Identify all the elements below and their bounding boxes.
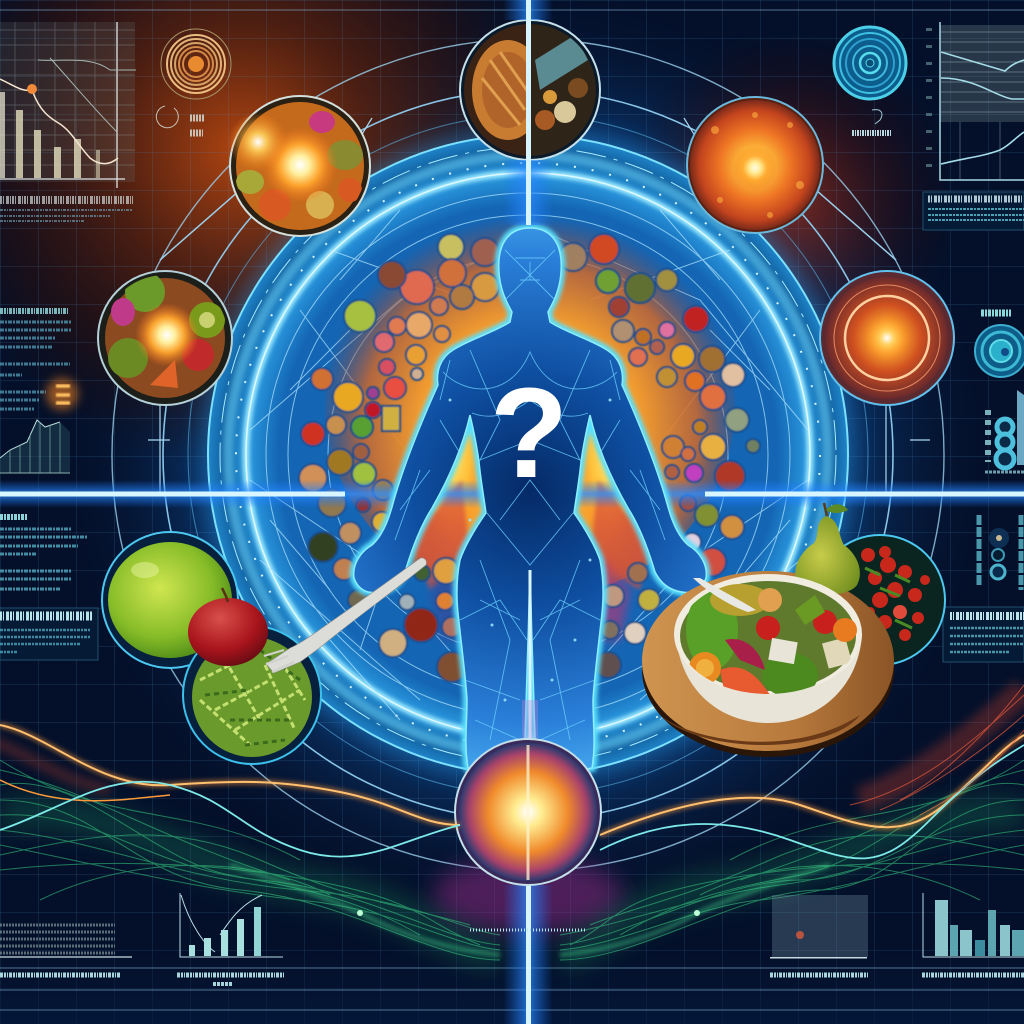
panel: bottom-left bar chart	[177, 893, 285, 984]
left food circle with glow	[98, 271, 232, 405]
food icons: left cluster	[299, 234, 499, 682]
upper-left food circle with glow	[228, 96, 370, 236]
knife	[693, 578, 756, 612]
food icons: right cluster	[559, 234, 760, 678]
apple circle	[102, 532, 238, 668]
question mark: ?	[490, 362, 568, 505]
human body figure	[354, 228, 706, 771]
sine waves with green particle fan	[0, 685, 1024, 960]
outer orbit rings	[112, 39, 944, 871]
magenta glow below bottom circle	[433, 857, 623, 933]
panel: lower-left text block	[0, 517, 98, 660]
vertical light beam	[503, 0, 553, 1024]
fork	[264, 558, 426, 673]
icon: cyan concentric dial	[834, 27, 906, 133]
panel: top-right line chart	[923, 22, 1024, 230]
panel: bottom-left text lines	[0, 925, 132, 975]
salad bowl	[674, 574, 862, 723]
bottom glowing circle	[455, 739, 601, 885]
salad circle	[183, 626, 321, 764]
panel: right header with dial and glyph column	[975, 313, 1024, 472]
icon: gold spiral dial	[156, 29, 231, 133]
orange energy aura behind body	[325, 210, 735, 640]
right fruit circle	[844, 534, 946, 664]
glowing central disc	[202, 129, 854, 781]
panel: bottom-right dot matrix	[770, 895, 868, 975]
pear	[795, 503, 860, 595]
panel: right lower glyph block	[943, 515, 1024, 662]
panel: top-left bar and line chart	[0, 22, 136, 221]
red apple	[188, 588, 268, 666]
wooden plate	[642, 571, 894, 757]
panel: bottom centre tick strip	[470, 928, 586, 932]
horizontal light beam	[0, 480, 1024, 508]
right reactor circle	[820, 271, 954, 405]
top food circle	[460, 20, 600, 160]
panel: left text block with area chart	[0, 311, 78, 473]
upper-right fireball circle	[687, 97, 823, 233]
panel: bottom-right bar chart	[922, 893, 1024, 975]
